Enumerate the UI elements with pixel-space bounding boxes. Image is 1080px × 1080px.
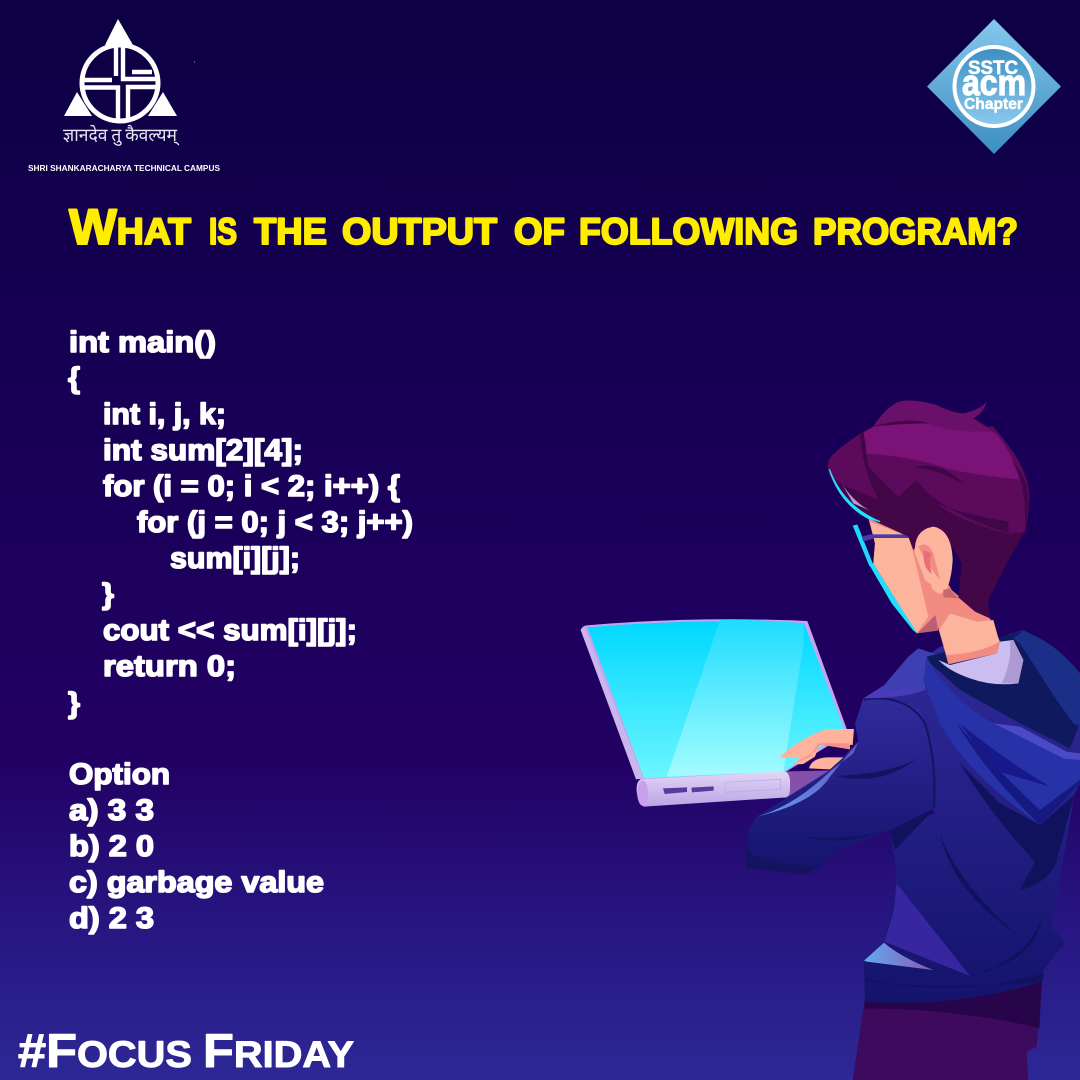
code block: cout << sum[i][j];	[103, 614, 357, 647]
footer hashtag: #FOCUS FRIDAY	[18, 1024, 354, 1077]
title: OUTPUT	[342, 211, 497, 252]
code block: sum[i][j];	[170, 542, 300, 575]
answer options: c) garbage value	[69, 866, 324, 899]
motto: ज्ञानदेव तु कैवल्यम्	[63, 121, 180, 147]
title: PROGRAM?	[813, 211, 1018, 252]
title: FOLLOWING	[579, 211, 798, 252]
code block: }	[102, 578, 114, 611]
hood and collar	[880, 631, 1080, 825]
head	[828, 400, 1029, 664]
answer options: b) 2 0	[69, 830, 154, 863]
glasses	[853, 524, 920, 633]
answer options	[69, 758, 324, 935]
illustration: person	[746, 400, 1080, 1080]
code block: {	[68, 362, 80, 395]
answer options: a) 3 3	[69, 794, 154, 827]
hood band	[923, 657, 1080, 825]
logo: SSTC ACM chapter	[927, 19, 1061, 154]
pants	[853, 980, 1042, 1080]
title: OF	[514, 211, 565, 252]
logo: Shri Shankaracharya Technical Campus	[28, 19, 220, 173]
illustration: laptop	[581, 619, 857, 807]
icon: triangles and emblem	[64, 19, 177, 122]
hair	[828, 400, 1029, 618]
logo: SSTC ACM chapter: acm	[962, 62, 1026, 103]
stray dot	[194, 62, 195, 63]
title: WHAT	[69, 199, 191, 255]
torso and pants	[746, 630, 1080, 1080]
laptop base	[637, 770, 857, 807]
title: IS	[209, 211, 237, 252]
code block: int i, j, k;	[103, 398, 226, 431]
hoodie body	[863, 630, 1080, 1003]
code block: for (i = 0; i < 2; i++) {	[103, 470, 400, 503]
code block: int sum[2][4];	[103, 434, 303, 467]
logo: SSTC ACM chapter: Chapter	[964, 96, 1023, 113]
title	[69, 199, 1018, 255]
logo: SSTC ACM chapter: SSTC	[968, 58, 1018, 79]
code block	[68, 326, 413, 720]
neck and face	[868, 518, 1000, 664]
code block: for (j = 0; j < 3; j++)	[137, 506, 413, 539]
collar	[938, 640, 1023, 684]
hand	[779, 729, 854, 769]
code block: }	[68, 687, 80, 720]
laptop screen	[581, 619, 848, 780]
hoodie shading	[864, 763, 1074, 988]
title: THE	[254, 211, 327, 252]
code block: int main()	[69, 326, 216, 359]
ear	[915, 527, 958, 598]
answer options: d) 2 3	[69, 902, 154, 935]
code block: return 0;	[103, 650, 236, 683]
answer options: Option	[69, 758, 170, 791]
campus name: SHRI SHANKARACHARYA TECHNICAL CAMPUS	[28, 163, 220, 173]
arm	[746, 673, 935, 874]
